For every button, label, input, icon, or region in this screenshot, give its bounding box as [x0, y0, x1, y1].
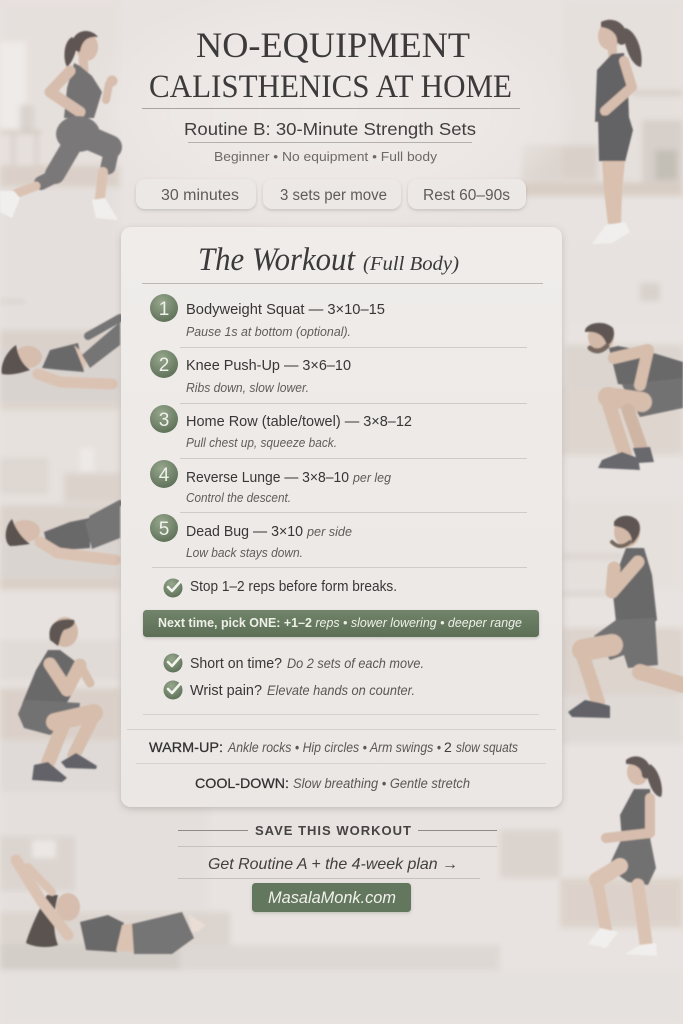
- exercise 4: per leg: [352, 470, 392, 485]
- exercise 2: Ribs down, slow lower.: [186, 380, 309, 395]
- figure: man goblet squat, left: [18, 617, 97, 782]
- pill: rest: [408, 179, 526, 209]
- tip: short on time: Short on time?: [190, 655, 282, 672]
- tip: stop before form breaks: Stop 1–2 reps before form breaks.: [190, 578, 397, 595]
- exercise 5: 5: [159, 519, 169, 540]
- exercise 2: 2: [159, 355, 169, 376]
- figure: woman glute bridge, left: [2, 318, 120, 384]
- warm-up line: 2: [444, 739, 452, 755]
- button: website: [252, 883, 411, 912]
- figure: man squat hinge, right: [585, 323, 683, 470]
- panel: workout card: [121, 227, 562, 807]
- card heading: [198, 242, 459, 278]
- warm-up line: slow squats: [456, 740, 518, 755]
- soft glow behind title: [80, 0, 580, 235]
- exercise 4: Reverse Lunge — 3×8–10: [186, 469, 349, 486]
- title: NO-EQUIPMENT: [196, 25, 470, 65]
- call to action: Get Routine A + the 4-week plan →: [208, 856, 458, 873]
- figure: woman lunge, top left: [0, 31, 118, 220]
- exercise 2: Knee Push-Up — 3×6–10: [186, 357, 351, 374]
- exercise 1: 1: [159, 299, 169, 320]
- tip: wrist pain: Wrist pain?: [190, 682, 262, 699]
- cool-down line: COOL-DOWN:: [195, 775, 289, 791]
- exercise 1: [150, 294, 385, 339]
- figure: woman floor pose, left: [6, 503, 120, 560]
- tip: short on time: [164, 654, 424, 672]
- exercise 4: 4: [159, 465, 170, 486]
- figure: woman high knee, bottom right: [588, 756, 662, 956]
- exercise 1: Pause 1s at bottom (optional).: [186, 324, 351, 339]
- exercise 3: 3: [159, 410, 169, 431]
- title: CALISTHENICS AT HOME: [149, 69, 512, 105]
- card heading: The Workout: [198, 242, 356, 278]
- exercise 2: [150, 350, 351, 395]
- exercise 1: Bodyweight Squat — 3×10–15: [186, 301, 385, 318]
- tip: wrist pain: [164, 680, 415, 700]
- warm-up line: [149, 739, 518, 755]
- subtitle: Routine B: 30-Minute Strength Sets: [184, 119, 476, 139]
- pill: duration: [136, 179, 256, 209]
- pill: duration: 30 minutes: [161, 187, 239, 204]
- pill: sets: 3 sets per move: [280, 187, 387, 204]
- warm-up line: WARM-UP:: [149, 739, 223, 755]
- pill: rest: Rest 60–90s: [423, 187, 510, 204]
- banner: progression: Next time, pick ONE: +1–2 reps • slower lowering • deeper range: [158, 615, 522, 630]
- cool-down line: [195, 775, 470, 791]
- figure: man reverse lunge, right: [568, 516, 683, 718]
- exercise 3: Home Row (table/towel) — 3×8–12: [186, 413, 412, 430]
- exercise 3: [150, 405, 412, 450]
- save heading: SAVE THIS WORKOUT: [255, 823, 411, 838]
- figure: woman floor reach, bottom left: [16, 860, 206, 954]
- banner: progression: [143, 610, 539, 637]
- tip: wrist pain: Elevate hands on counter.: [267, 682, 415, 698]
- exercise 5: [150, 514, 352, 560]
- exercise 5: per side: [306, 524, 352, 539]
- exercise 5: Dead Bug — 3×10: [186, 523, 303, 540]
- exercise 4: [150, 460, 392, 505]
- audience line: Beginner • No equipment • Full body: [214, 149, 438, 164]
- cool-down line: Slow breathing • Gentle stretch: [293, 776, 470, 791]
- warm-up line: Ankle rocks • Hip circles • Arm swings •: [227, 740, 441, 755]
- exercise 3: Pull chest up, squeeze back.: [186, 435, 337, 450]
- title: [149, 25, 512, 105]
- tip: short on time: Do 2 sets of each move.: [287, 655, 424, 671]
- button: website: MasalaMonk.com: [268, 888, 396, 907]
- card heading: (Full Body): [363, 253, 459, 275]
- exercise 4: Control the descent.: [186, 490, 291, 505]
- pill: sets: [263, 179, 401, 209]
- exercise 5: Low back stays down.: [186, 545, 303, 560]
- figure: woman standing, top right: [592, 20, 642, 244]
